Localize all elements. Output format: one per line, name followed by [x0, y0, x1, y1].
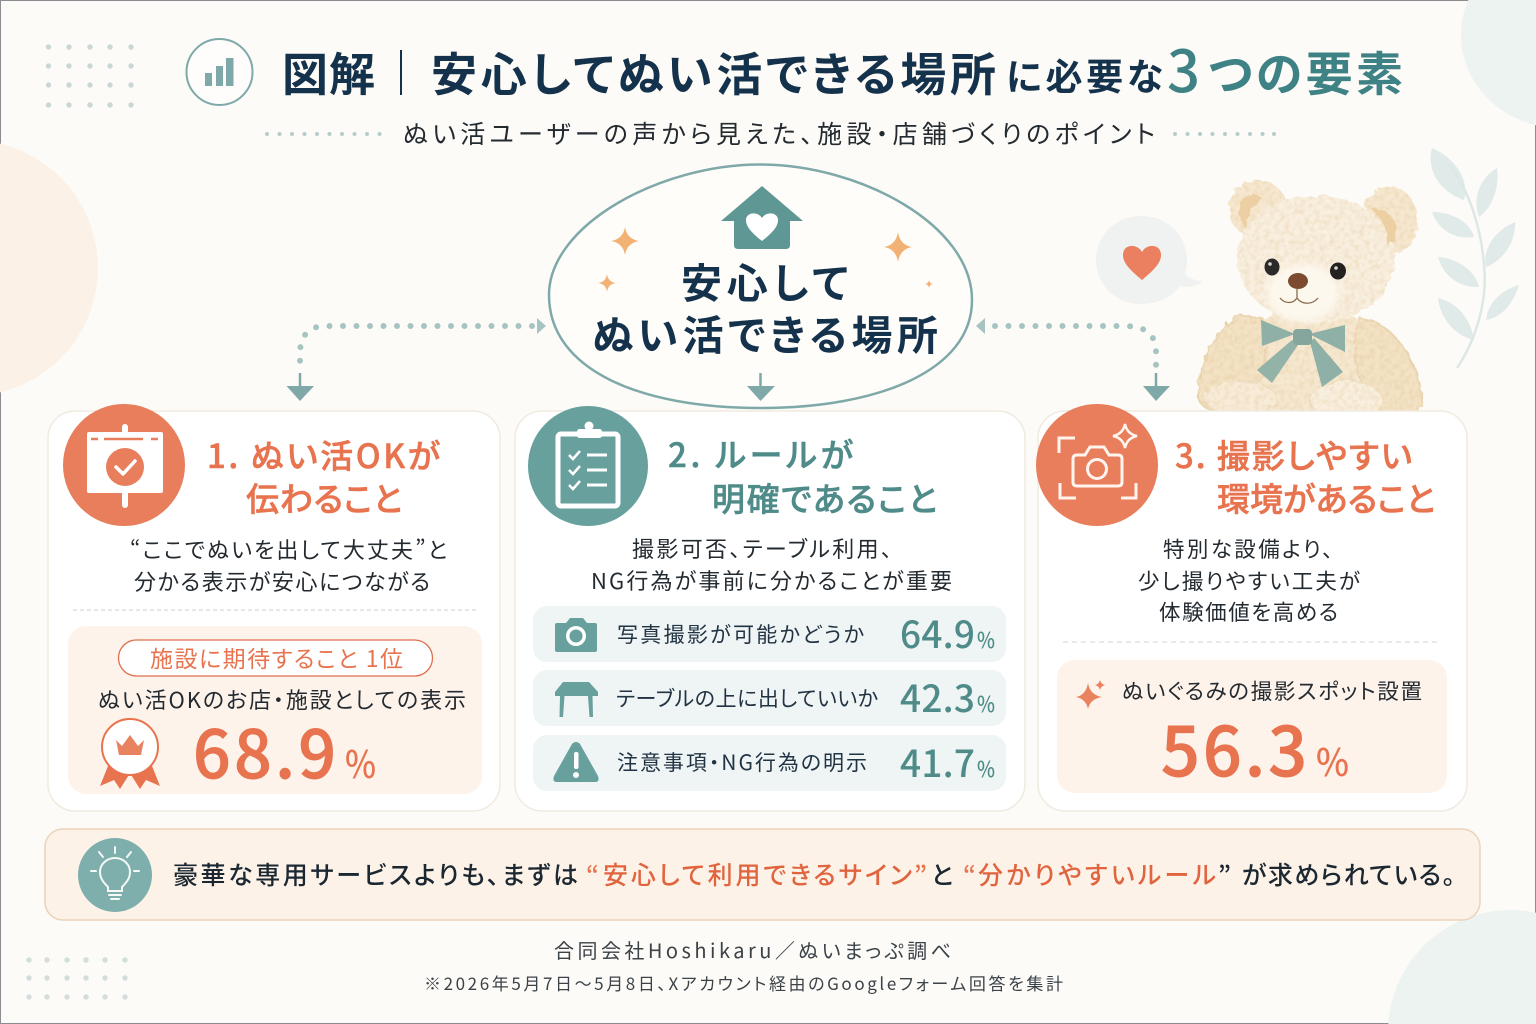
- callout text: “: [963, 856, 976, 892]
- icon: medal with crown: [100, 719, 160, 789]
- panel: card 2: [515, 406, 1025, 811]
- row: table: [533, 669, 1006, 726]
- row: photo: 64.9: [900, 605, 975, 659]
- icon: warning triangle: [553, 742, 599, 782]
- title: 3: [1167, 25, 1200, 109]
- icon: leaf branch: [1431, 148, 1519, 368]
- arrow: center to card 2: [747, 373, 775, 401]
- title: [282, 25, 1403, 109]
- stat box: %: [1316, 732, 1349, 787]
- callout text: 豪華な専用サービスよりも、まずは: [173, 856, 578, 892]
- row: table: 42.3: [900, 669, 975, 723]
- callout text: が求められている。: [1242, 856, 1455, 892]
- row: photo: [533, 605, 1006, 662]
- title: 図解: [282, 39, 375, 105]
- center ellipse: safe place: [549, 164, 972, 408]
- center ellipse: safe place: 安心して: [681, 250, 848, 310]
- heading: 伝わること: [246, 473, 402, 521]
- stat label: ぬい活OKのお店・施設としての表示: [98, 683, 466, 715]
- callout text: ”: [914, 856, 927, 892]
- icon: house with heart: [721, 186, 803, 249]
- subtitle: ぬい活ユーザーの声から見えた、施設・店舗づくりのポイント: [403, 115, 1155, 151]
- background shape: teal bottom right: [1388, 910, 1536, 1024]
- stat box: [1057, 660, 1447, 796]
- icon: camera frame with sparkle: [1036, 404, 1158, 526]
- background shape: teal top right: [1461, 0, 1536, 125]
- row: warning: %: [977, 752, 995, 784]
- row: photo: 写真撮影が可能かどうか: [617, 619, 864, 649]
- row: warning: [533, 734, 1006, 791]
- callout text: 安心して利用できるサイン: [603, 856, 912, 892]
- description: 撮影可否、テーブル利用、: [632, 532, 892, 564]
- heading: 明確であること: [712, 473, 937, 521]
- description: 体験価値を高める: [1159, 596, 1338, 627]
- icon: table: [555, 682, 598, 717]
- icon: camera: [555, 618, 597, 652]
- description: 少し撮りやすい工夫が: [1138, 565, 1360, 596]
- icon: chart badge: [186, 39, 252, 105]
- icon: light bulb: [78, 838, 152, 912]
- stat value: %: [345, 734, 376, 789]
- heading: [1175, 430, 1435, 521]
- background shape: peach circle: [0, 144, 98, 392]
- heading: [668, 429, 937, 521]
- icon: sparkles: [1076, 680, 1105, 709]
- description: [1138, 533, 1360, 627]
- icon: clipboard: [528, 406, 648, 526]
- icon: teddy bear: [1196, 180, 1424, 410]
- stat box: [68, 626, 482, 798]
- row: warning: 41.7: [900, 734, 975, 788]
- pill label: 施設に期待すること 1位: [150, 640, 403, 674]
- heading: 1. ぬい活OKが: [207, 430, 441, 478]
- description: 分かる表示が安心につながる: [134, 565, 430, 597]
- description: NG行為が事前に分かることが重要: [591, 564, 952, 596]
- icon: heart speech bubble: [1096, 216, 1203, 304]
- footnote: ※2026年5月7日～5月8日、Xアカウント経由のGoogleフォーム回答を集計: [424, 970, 1063, 995]
- callout text: 分かりやすいルール: [978, 856, 1216, 892]
- row: warning: 注意事項・NG行為の明示: [617, 747, 867, 777]
- row: photo: %: [977, 623, 995, 655]
- stat box: 56.3: [1161, 697, 1307, 796]
- row: table: テーブルの上に出していいか: [616, 683, 878, 713]
- description: [591, 532, 952, 596]
- heading: 環境があること: [1217, 473, 1435, 521]
- panel: card 3: [1036, 404, 1467, 811]
- callout text: “: [586, 856, 599, 892]
- title: つの要素: [1208, 36, 1403, 105]
- source credit: 合同会社Hoshikaru／ぬいまっぷ調べ: [554, 935, 951, 964]
- callout text: [173, 856, 1455, 892]
- callout: conclusion: [45, 829, 1480, 920]
- center ellipse: safe place: ぬい活できる場所: [592, 302, 938, 362]
- arrow: center to card 1: [286, 318, 546, 401]
- title: に必要な: [1006, 47, 1163, 101]
- icon: sparkles: [598, 227, 933, 292]
- heading: 3. 撮影しやすい: [1175, 430, 1412, 478]
- row: table: %: [977, 687, 995, 719]
- arrow: center to card 3: [976, 318, 1170, 401]
- heading: [207, 430, 441, 521]
- title: 安心してぬい活できる場所: [431, 39, 996, 105]
- icon: sign with check: [63, 404, 185, 526]
- description: 特別な設備より、: [1163, 533, 1333, 564]
- callout text: ”: [1218, 856, 1231, 892]
- dot pattern: top left: [46, 44, 134, 108]
- callout text: と: [931, 856, 953, 892]
- stat value: 68.9: [193, 702, 336, 798]
- heading: 2. ルールが: [668, 429, 854, 477]
- dot pattern: bottom left: [26, 957, 128, 1000]
- description: [130, 533, 447, 597]
- stat box: ぬいぐるみの撮影スポット設置: [1122, 675, 1422, 706]
- description: “ここでぬいを出して大丈夫”と: [130, 533, 447, 565]
- panel: card 1: [48, 404, 500, 811]
